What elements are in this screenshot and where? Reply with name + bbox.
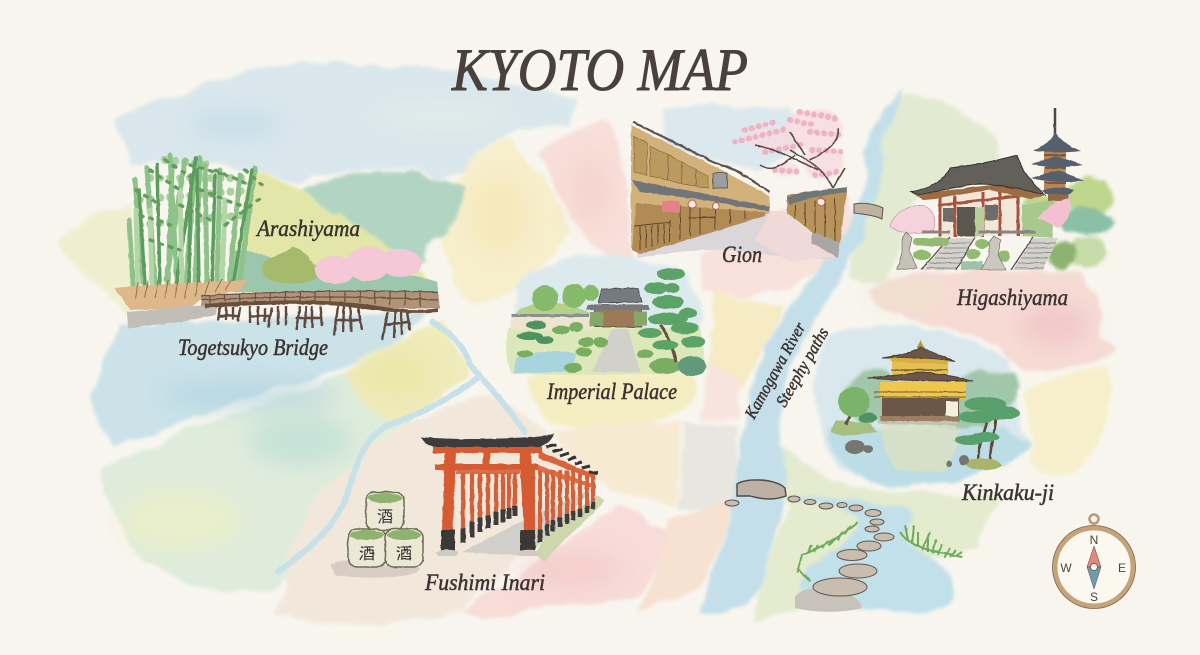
garden pine <box>660 325 676 362</box>
shadow <box>330 561 420 578</box>
label: Togetsukyo Bridge: Togetsukyo Bridge <box>178 335 328 360</box>
label: Arashiyama: Arashiyama <box>255 216 360 241</box>
torii posts <box>442 450 535 530</box>
left pine <box>517 320 554 344</box>
region: pink strip <box>702 365 742 422</box>
torii lower beam <box>435 464 538 470</box>
island right <box>964 458 1002 470</box>
watercolor map regions <box>58 63 1120 623</box>
hill <box>230 172 430 290</box>
barrel bottom right: 酒 <box>396 540 412 564</box>
bamboo leaves <box>136 160 265 250</box>
receding roof beams <box>538 451 596 489</box>
stepping stones <box>725 496 894 612</box>
railing <box>922 230 1035 234</box>
right pine <box>978 418 996 462</box>
path <box>462 488 594 556</box>
lattice windows and door <box>943 208 954 222</box>
label: Higashiyama: Higashiyama <box>956 285 1068 310</box>
bridge deck <box>201 291 440 308</box>
region: lower green wash <box>755 440 1000 622</box>
ground floor <box>882 398 959 418</box>
receding beams between posts <box>456 469 520 474</box>
lawn <box>506 328 706 375</box>
roof eave <box>912 184 1045 200</box>
cherry branches <box>755 128 845 188</box>
middle floor <box>880 382 966 399</box>
illustration: Higashiyama temple and pagoda <box>890 108 1114 270</box>
needle north <box>1087 546 1101 567</box>
barrel top: 酒 <box>377 503 393 527</box>
stair railings <box>921 237 1033 270</box>
region: peach field <box>552 422 680 505</box>
label: Fushimi Inari: Fushimi Inari <box>424 570 545 595</box>
central path <box>592 329 640 372</box>
compass <box>1052 514 1136 608</box>
bamboo stalks <box>129 155 255 285</box>
wall <box>511 315 590 330</box>
region: yellow field <box>345 322 472 422</box>
region: Higashiyama green wash <box>850 96 1000 285</box>
paper lanterns <box>688 200 696 208</box>
gate roof <box>598 288 642 303</box>
watercolor mottling <box>120 100 1090 590</box>
stepping-stone stream <box>725 480 962 614</box>
compass loop <box>1090 514 1098 524</box>
compass ring <box>1055 528 1133 606</box>
region: grey field <box>676 425 738 512</box>
temple beams <box>938 188 1020 237</box>
gate body <box>594 305 642 327</box>
torii upper beam <box>433 447 542 453</box>
label: Steephy paths: Steephy paths <box>772 324 833 410</box>
background trees <box>838 370 1016 430</box>
cherry blossom canopy <box>747 112 845 180</box>
bridge railing <box>201 291 438 307</box>
label: Kamogawa River: Kamogawa River <box>740 319 810 423</box>
sake barrels <box>330 492 423 578</box>
top roof <box>882 347 955 361</box>
region: left yellow-green wash <box>58 205 135 320</box>
needle south <box>1087 567 1101 589</box>
region: Higashiyama pink wash <box>866 270 1120 374</box>
mountain <box>300 169 463 262</box>
stone bridge <box>737 480 786 499</box>
temple garden shrubs <box>913 238 1010 270</box>
left machiya wall <box>631 125 770 252</box>
illustration: Fushimi Inari <box>421 434 605 562</box>
olive bush <box>262 247 318 284</box>
region: peach lower block <box>640 505 732 612</box>
stone lanterns <box>897 232 917 270</box>
garden trees <box>1020 179 1114 269</box>
region: Gion sky wash <box>662 106 800 170</box>
temple upper roof <box>911 155 1045 195</box>
torii kasagi <box>421 434 554 447</box>
rock bank <box>127 305 218 328</box>
region: Fushimi tan wash <box>280 395 590 623</box>
pond <box>514 351 576 373</box>
barrel bottom left: 酒 <box>359 540 375 564</box>
receding left posts <box>463 473 515 528</box>
right garden <box>1022 200 1055 238</box>
blossom clusters <box>735 112 843 175</box>
reflection <box>880 425 960 472</box>
top finial <box>917 340 925 348</box>
region: Kinkaku-ji sky and pond wash <box>815 326 1030 486</box>
pink tree left <box>890 205 935 233</box>
lower roof <box>632 180 770 211</box>
left tree <box>846 405 855 425</box>
region: Gion pink street <box>700 200 862 296</box>
pond <box>825 430 1030 484</box>
rocks <box>845 440 865 454</box>
label: Gion: Gion <box>722 242 762 267</box>
cherry trees <box>315 247 422 284</box>
label: Imperial Palace: Imperial Palace <box>546 379 677 404</box>
tree line <box>230 250 438 292</box>
region: Arashiyama sky wash <box>113 63 575 185</box>
bridge piers <box>218 306 410 340</box>
bamboo leaves back <box>140 160 250 225</box>
label: Kinkaku-ji: Kinkaku-ji <box>961 480 1054 505</box>
middle roof <box>867 372 973 381</box>
background trees <box>515 284 599 314</box>
illustration: Imperial Palace <box>506 268 706 376</box>
main torii <box>421 434 554 556</box>
compass letters: N <box>1090 533 1098 547</box>
receding right posts <box>533 470 593 535</box>
title: KYOTO MAP <box>451 37 748 103</box>
shrubs <box>517 322 706 376</box>
compass letters: E <box>1118 561 1126 575</box>
river bridge stone <box>854 203 883 219</box>
compass letters: S <box>1090 590 1098 604</box>
region: centre yellow block <box>708 295 785 388</box>
torii bases <box>441 530 535 552</box>
region: Imperial Palace label wash <box>530 372 697 428</box>
lower lattice <box>632 203 765 254</box>
grass bank <box>114 280 248 310</box>
river: thin Katsura branches <box>278 322 525 572</box>
street <box>637 211 840 259</box>
island left <box>830 420 878 436</box>
roof line <box>633 122 770 192</box>
region: centre pink wash <box>541 124 634 262</box>
right machiya <box>787 188 847 243</box>
compass letters: W <box>1060 561 1072 575</box>
illustration: Gion street <box>631 112 847 262</box>
pagoda <box>1031 108 1084 201</box>
region: right yellow wash <box>1020 366 1111 473</box>
temple walls <box>938 187 1022 237</box>
grass verge <box>535 495 605 562</box>
stream water <box>785 497 957 614</box>
region: centre yellow wash <box>440 140 570 306</box>
balcony rail <box>874 392 966 397</box>
region: Togetsukyo river wash <box>91 312 430 445</box>
region: Fushimi pink wash <box>460 504 668 620</box>
window <box>713 173 727 188</box>
stream grass <box>797 522 962 582</box>
region: Imperial Palace sky <box>510 253 700 350</box>
pink tree right <box>1037 198 1070 228</box>
compass letters <box>1060 533 1126 604</box>
stairs <box>923 238 973 270</box>
region: lower-left green wash <box>100 366 410 592</box>
upper lattice screens <box>634 136 708 188</box>
noren curtain <box>662 201 680 212</box>
river: Kamogawa <box>700 92 905 615</box>
upper floor <box>892 358 948 380</box>
illustration: Arashiyama and Togetsukyo Bridge <box>114 155 463 340</box>
illustration: Kinkaku-ji golden pavilion <box>825 340 1030 484</box>
